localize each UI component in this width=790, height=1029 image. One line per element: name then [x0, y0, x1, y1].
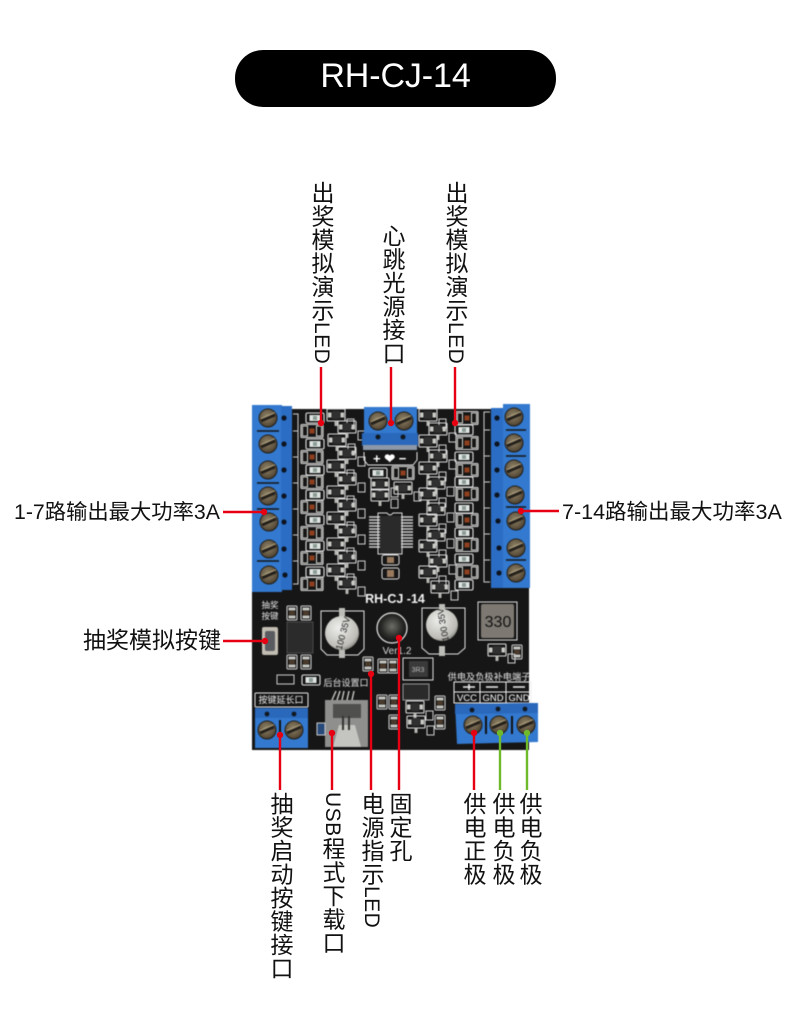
red leader line: test button [223, 638, 268, 644]
button label and test button: 按键 [261, 611, 279, 621]
power terminal labels: 供电及负极补电端子 [448, 671, 530, 682]
mounting hole [377, 613, 407, 643]
label: start button interface: 抽奖启动按键接口 [267, 792, 293, 980]
red leader line: right output [518, 508, 559, 514]
red leader line: supply positive [471, 730, 477, 790]
label: top left prize LED: 出奖模拟演示 LED [308, 181, 334, 364]
small inductor 3R3: 3R3 [412, 667, 425, 674]
label: top right prize LED: 出奖模拟演示 LED [442, 181, 468, 364]
red leader line: start button interface [277, 732, 283, 790]
right electrolytic capacitor [422, 604, 465, 656]
red leader line: left prize LED [318, 367, 324, 426]
right transistor columns [419, 409, 458, 600]
power terminal labels: GND [482, 693, 504, 704]
title pill: RH-CJ-14: RH-CJ-14 [320, 57, 471, 95]
small inductor 3R3 [403, 658, 433, 680]
label: draw simulation button: 抽奖模拟按键 [83, 627, 221, 653]
red leader line: heartbeat interface [388, 367, 394, 426]
label: power indicator LED: 电源指示 LED [358, 792, 384, 928]
top heartbeat terminal block: + ❤ − [373, 451, 407, 466]
red leader line: power LED [368, 671, 374, 790]
red leader line: mounting hole [396, 635, 402, 790]
green leader line: supply negative 1 [497, 730, 503, 790]
top heartbeat terminal block [362, 407, 418, 466]
label: USB program download port: USB 程式下载口 [319, 792, 345, 954]
red leader line: right prize LED [452, 367, 458, 426]
label: left outputs: 1-7路输出最大功率3A [14, 500, 220, 524]
power terminal labels: VCC [457, 693, 477, 704]
main IC chip [369, 513, 413, 554]
label: right outputs: 7-14路输出最大功率3A [562, 500, 782, 524]
330 power inductor: 330 [485, 614, 511, 631]
title pill: RH-CJ-14 [235, 50, 556, 107]
circuit board base [252, 409, 529, 750]
left bracket silkscreen [293, 414, 298, 584]
mini USB connector [317, 691, 368, 747]
USB setup label: 后台设置口 [323, 677, 369, 688]
version text: Ver1.2 [383, 646, 412, 657]
key extension label [255, 693, 308, 707]
left electrolytic capacitor [321, 608, 364, 658]
right bracket silkscreen [484, 412, 490, 582]
centre small components [369, 466, 421, 579]
power terminal labels [448, 671, 531, 704]
bottom left terminal block [255, 708, 308, 748]
label: supply negative 1: 供电负极 [489, 792, 515, 886]
key extension label: 按键延长口 [258, 694, 304, 705]
optocoupler [287, 606, 313, 669]
label: mounting hole: 固定孔 [386, 792, 412, 862]
330 power inductor [478, 602, 517, 640]
right output LED and resistor column [455, 412, 478, 590]
left terminal block, seven screws [252, 405, 292, 592]
red leader line: USB [329, 730, 335, 790]
power terminal labels: GND [508, 693, 530, 704]
board model text: RH-CJ -14 [365, 592, 425, 606]
label: heartbeat light interface: 心跳光源接口 [379, 224, 405, 365]
diode and small parts [277, 644, 522, 735]
power terminal block [455, 703, 538, 744]
green leader line: supply negative 2 [524, 730, 530, 790]
button label and test button [261, 600, 279, 655]
left output LED and resistor column [301, 413, 324, 590]
left transistor columns [327, 409, 365, 596]
right terminal block, seven screws [491, 404, 530, 588]
label: supply positive: 供电正极 [460, 792, 486, 886]
right electrolytic capacitor: 100 35V [435, 607, 451, 642]
button label and test button: 抽奖 [261, 600, 279, 610]
left electrolytic capacitor: 100 35V [334, 616, 352, 651]
label: supply negative 2: 供电负极 [516, 792, 542, 886]
red leader line: left output [223, 509, 267, 515]
